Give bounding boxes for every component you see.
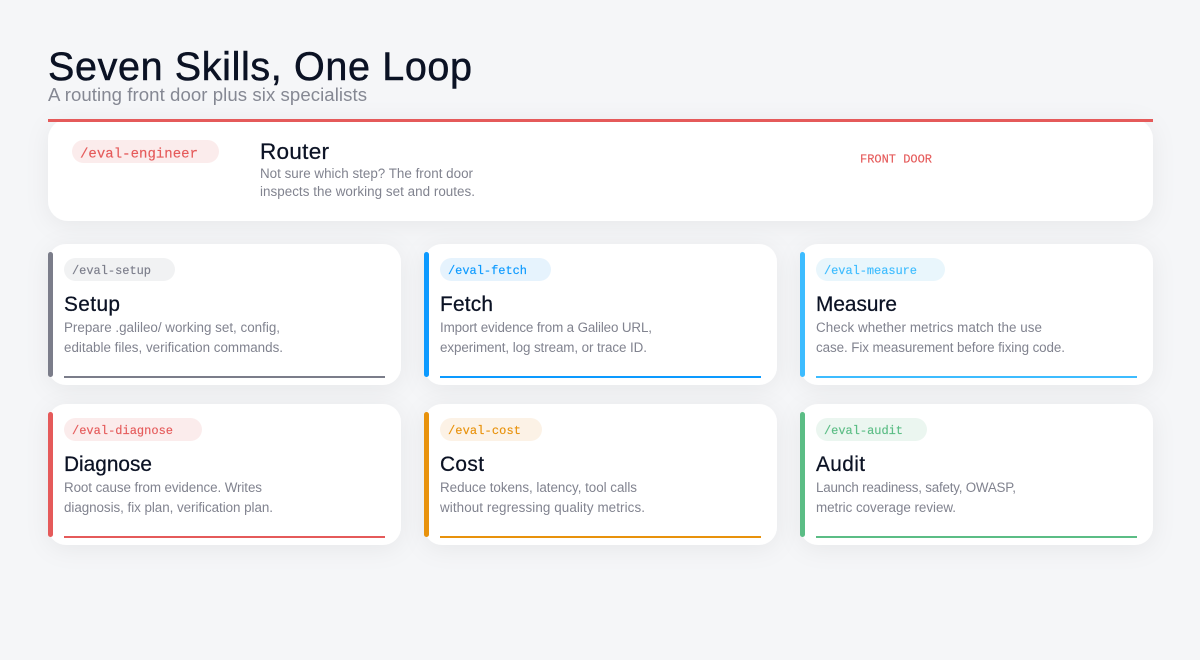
measure heading: Measure: [816, 293, 897, 316]
fetch description: [440, 320, 652, 355]
router command pill: /eval-engineer: [80, 146, 198, 162]
audit description: [816, 480, 1016, 515]
fetch heading: Fetch: [440, 293, 493, 316]
router description: inspects the working set and routes.: [260, 184, 475, 199]
measure command pill: [816, 258, 945, 281]
diagnose heading: Diagnose: [64, 453, 152, 476]
audit command pill: [816, 418, 927, 441]
panel: router: [48, 119, 1153, 221]
fetch description: Import evidence from a Galileo URL,: [440, 320, 652, 335]
setup description: editable files, verification commands.: [64, 340, 283, 355]
diagnose description: Root cause from evidence. Writes: [64, 480, 262, 495]
diagnose description: diagnosis, fix plan, verification plan.: [64, 500, 273, 515]
audit description: metric coverage review.: [816, 500, 956, 515]
audit description: Launch readiness, safety, OWASP,: [816, 480, 1016, 495]
measure command pill: /eval-measure: [824, 264, 917, 278]
router description: Not sure which step? The front door: [260, 166, 474, 181]
panel: measure: [800, 244, 1153, 385]
setup command pill: /eval-setup: [72, 264, 151, 278]
cost heading: Cost: [440, 453, 484, 476]
measure description: case. Fix measurement before fixing code.: [816, 340, 1065, 355]
fetch description: experiment, log stream, or trace ID.: [440, 340, 647, 355]
panel: audit: [800, 404, 1153, 545]
diagnose command pill: /eval-diagnose: [72, 424, 173, 438]
router description: [260, 166, 475, 199]
cost description: [439, 480, 645, 515]
subtitle: A routing front door plus six specialists: [48, 84, 367, 105]
setup heading: Setup: [64, 293, 120, 316]
cost command pill: [440, 418, 542, 441]
title: Seven Skills, One Loop: [48, 45, 472, 89]
cost description: Reduce tokens, latency, tool calls: [440, 480, 637, 495]
diagnose description: [64, 480, 273, 515]
router command pill: [72, 140, 219, 163]
front door label: FRONT DOOR: [860, 152, 932, 166]
fetch command pill: [440, 258, 551, 281]
fetch command pill: /eval-fetch: [448, 264, 527, 278]
panel: setup: [48, 244, 401, 385]
panel: fetch: [424, 244, 777, 385]
audit heading: Audit: [816, 453, 865, 476]
setup description: [64, 320, 283, 355]
measure description: [816, 320, 1065, 355]
panel: cost: [424, 404, 777, 545]
setup command pill: [64, 258, 175, 281]
cost description: without regressing quality metrics.: [439, 500, 645, 515]
audit command pill: /eval-audit: [824, 424, 903, 438]
cost command pill: /eval-cost: [448, 424, 521, 438]
diagnose command pill: [64, 418, 202, 441]
router heading: Router: [260, 139, 330, 164]
panel: diagnose: [48, 404, 401, 545]
setup description: Prepare .galileo/ working set, config,: [64, 320, 280, 335]
measure description: Check whether metrics match the use: [816, 320, 1042, 335]
